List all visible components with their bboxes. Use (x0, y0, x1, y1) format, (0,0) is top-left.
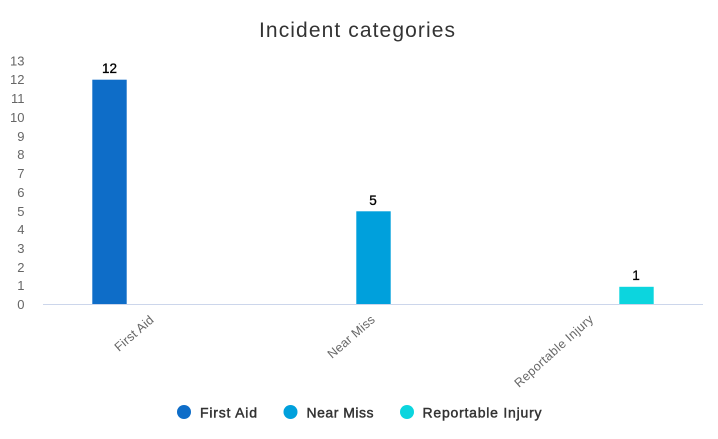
legend (177, 404, 542, 420)
y axis labels: 4 (17, 222, 24, 237)
legend item: Reportable Injury: Reportable Injury (422, 404, 542, 420)
y axis labels (10, 54, 24, 312)
bar: Near Miss: 5 (369, 193, 377, 208)
bar: First Aid: 12 (102, 61, 117, 76)
y axis labels: 2 (17, 260, 24, 275)
y axis labels: 6 (17, 185, 24, 200)
y axis labels: 11 (11, 91, 24, 106)
x axis labels: Near Miss (325, 313, 378, 361)
y axis labels: 9 (17, 129, 24, 144)
legend item: First Aid: First Aid (200, 404, 257, 420)
y axis labels: 8 (17, 147, 24, 162)
x axis line (43, 304, 703, 306)
y axis labels: 12 (10, 72, 24, 87)
bar: Reportable Injury (619, 268, 654, 304)
x axis labels: Reportable Injury (512, 312, 597, 390)
y axis labels: 10 (10, 110, 24, 125)
y axis labels: 5 (17, 204, 24, 219)
x axis labels: First Aid (112, 313, 156, 354)
y axis labels: 3 (17, 241, 24, 256)
bar: Reportable Injury: 1 (632, 268, 640, 283)
bar: First Aid (92, 61, 127, 304)
bar: Near Miss (356, 193, 391, 304)
y axis labels: 7 (17, 166, 24, 181)
y axis labels: 0 (17, 297, 24, 312)
y axis labels: 13 (10, 54, 24, 68)
legend item: Near Miss: Near Miss (306, 404, 374, 420)
title: Incident categories (259, 19, 455, 42)
x axis labels (112, 312, 597, 390)
y axis labels: 1 (17, 278, 24, 293)
